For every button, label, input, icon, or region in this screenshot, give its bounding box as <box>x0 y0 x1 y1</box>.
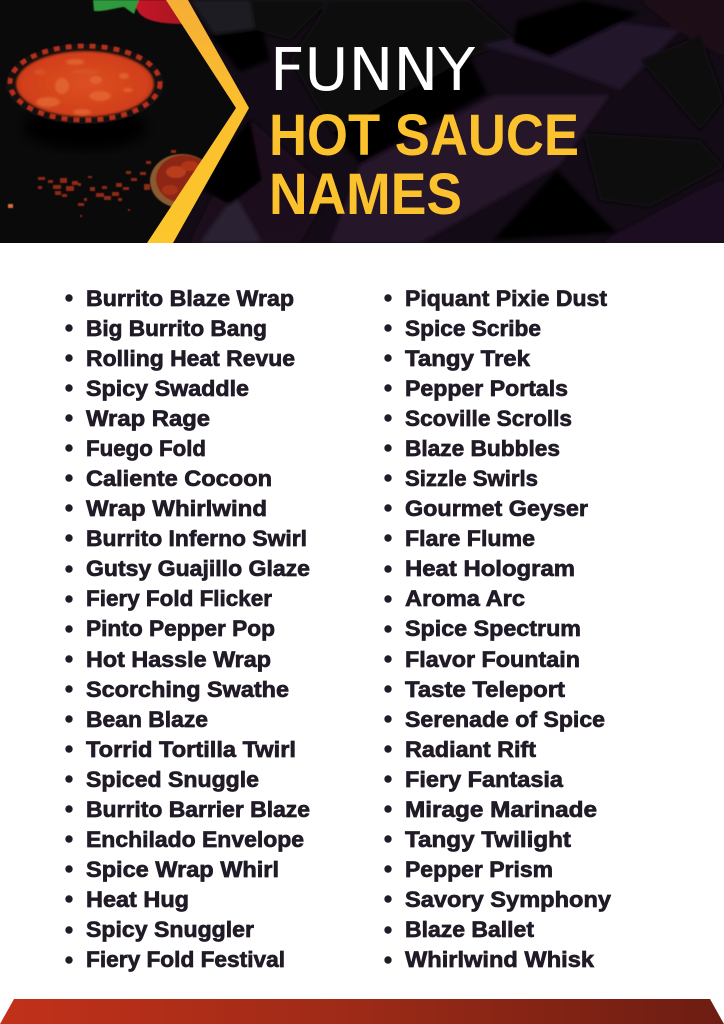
left column list: Bean Blaze <box>86 707 208 732</box>
left column list: Scorching Swathe <box>86 677 289 702</box>
icon: sauce bowl <box>6 44 164 150</box>
right column list: Flavor Fountain <box>405 647 580 672</box>
right column list <box>384 286 612 972</box>
left column list: Burrito Barrier Blaze <box>86 797 310 822</box>
left column list: Caliente Cocoon <box>86 466 272 491</box>
right column list: Serenade of Spice <box>405 707 605 732</box>
right column list: Mirage Marinade <box>405 797 597 822</box>
right column list: Sizzle Swirls <box>405 466 538 491</box>
left column list: Big Burrito Bang <box>86 316 267 341</box>
left column list: Fuego Fold <box>86 436 206 461</box>
title line: FUNNY: FUNNY <box>270 35 476 104</box>
right column list: Radiant Rift <box>405 737 537 762</box>
right column list: Pepper Prism <box>405 857 553 882</box>
left column list: Spiced Snuggle <box>86 767 259 792</box>
chili flakes <box>8 150 176 217</box>
right column list: Flare Flume <box>405 526 535 551</box>
left column list: Hot Hassle Wrap <box>86 647 271 672</box>
left column list: Gutsy Guajillo Glaze <box>86 556 310 581</box>
left column list: Spicy Snuggler <box>86 917 254 942</box>
footer red band <box>0 999 724 1024</box>
right column list: Aroma Arc <box>405 586 525 611</box>
title line: HOT SAUCE: HOT SAUCE <box>269 103 579 168</box>
left column list: Rolling Heat Revue <box>86 346 295 371</box>
right column list: Scoville Scrolls <box>405 406 572 431</box>
icon: chili pepper <box>93 0 184 24</box>
header banner <box>0 0 724 243</box>
icon: wooden spoon with chili flakes <box>149 153 202 207</box>
left column list: Fiery Fold Flicker <box>86 586 272 611</box>
title <box>272 47 577 214</box>
purple geometric background <box>190 0 724 243</box>
right column list: Tangy Twilight <box>405 827 572 852</box>
right column list: Whirlwind Whisk <box>405 947 595 972</box>
left column list: Burrito Inferno Swirl <box>86 526 307 551</box>
left column list: Enchilado Envelope <box>86 827 304 852</box>
right column list: Spice Scribe <box>405 316 541 341</box>
left column list: Spice Wrap Whirl <box>86 857 279 882</box>
left column list: Wrap Whirlwind <box>86 496 267 521</box>
left column list: Wrap Rage <box>86 406 210 431</box>
right column list: Gourmet Geyser <box>405 496 588 521</box>
left column list: Heat Hug <box>86 887 189 912</box>
right column list: Heat Hologram <box>405 556 575 581</box>
left column list: Burrito Blaze Wrap <box>86 286 294 311</box>
right column list: Fiery Fantasia <box>405 767 564 792</box>
left column list: Torrid Tortilla Twirl <box>86 737 296 762</box>
left column list: Pinto Pepper Pop <box>86 616 275 641</box>
right column list: Blaze Bubbles <box>405 436 560 461</box>
right column list: Savory Symphony <box>405 887 612 912</box>
right column list: Tangy Trek <box>405 346 531 371</box>
right column list: Spice Spectrum <box>405 616 581 641</box>
left column list: Fiery Fold Festival <box>86 947 285 972</box>
left column list <box>65 286 310 972</box>
yellow chevron <box>147 0 249 243</box>
right column list: Taste Teleport <box>405 677 566 702</box>
left column list: Spicy Swaddle <box>86 376 249 401</box>
title line: NAMES: NAMES <box>269 162 462 227</box>
right column list: Piquant Pixie Dust <box>405 286 608 311</box>
photo panel: hot sauce bowl on black <box>0 0 250 243</box>
right column list: Pepper Portals <box>405 376 568 401</box>
right column list: Blaze Ballet <box>405 917 535 942</box>
